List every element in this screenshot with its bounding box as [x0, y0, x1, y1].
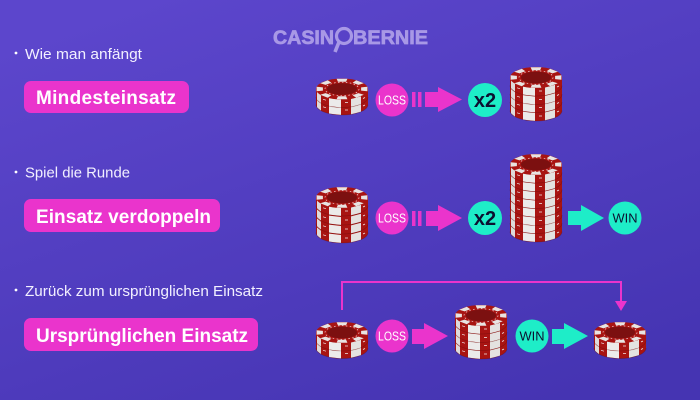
arrow: dashed pink — [412, 87, 462, 112]
section 1 pill: Mindesteinsatz — [24, 81, 189, 113]
badge: LOSS: LOSS — [378, 94, 406, 108]
chip stack: 2 chips — [316, 78, 368, 115]
badge: x2: x2 — [474, 90, 496, 112]
badge: WIN — [516, 320, 548, 352]
section 1 pill: Mindesteinsatz: Mindesteinsatz — [36, 88, 176, 109]
badge: WIN: WIN — [520, 330, 544, 344]
arrow: cyan — [568, 205, 604, 231]
badge: LOSS: LOSS — [378, 330, 406, 344]
row 3 flow — [316, 282, 646, 359]
section 1 subheading: Wie man anfängt — [25, 46, 143, 63]
chip stack: 4 chips — [316, 187, 368, 243]
section 3 pill: Ursprünglichen Einsatz — [24, 318, 258, 351]
icon: magnifying glass — [335, 28, 352, 52]
logo: CasinoBernie: CASIN — [273, 27, 334, 49]
section 2 subheading: Spiel die Runde — [25, 164, 130, 182]
logo: CasinoBernie — [273, 27, 428, 52]
section 3 pill: Ursprünglichen Einsatz: Ursprünglichen Einsatz — [36, 326, 248, 347]
chip stack: 4 chips — [455, 305, 507, 359]
chip stack: 2 chips — [316, 322, 368, 358]
chip stack: 4 chips — [510, 67, 562, 121]
logo: CasinoBernie: BERNIE — [353, 27, 428, 49]
badge: LOSS — [376, 320, 408, 352]
badge: WIN: WIN — [612, 212, 638, 226]
section 2 pill: Einsatz verdoppeln: Einsatz verdoppeln — [36, 207, 211, 228]
bracket arrow: back to original stake — [342, 282, 627, 311]
badge: x2 — [468, 83, 502, 117]
badge: LOSS: LOSS — [378, 212, 406, 226]
badge: x2 — [468, 201, 502, 235]
section 2 pill: Einsatz verdoppeln — [24, 199, 220, 232]
row 1 flow — [316, 67, 562, 121]
chip stack: 2 chips — [594, 322, 646, 358]
badge: LOSS — [376, 84, 408, 116]
row 2 flow — [316, 154, 642, 243]
chip stack: 8 chips — [510, 154, 562, 242]
badge: x2: x2 — [474, 208, 496, 230]
badge: WIN — [608, 202, 642, 234]
arrow: cyan — [552, 323, 588, 349]
arrow: pink — [412, 323, 448, 349]
section 3 subheading: Zurück zum ursprünglichen Einsatz — [25, 283, 263, 300]
badge: LOSS — [376, 202, 408, 234]
arrow: dashed pink — [412, 205, 462, 231]
